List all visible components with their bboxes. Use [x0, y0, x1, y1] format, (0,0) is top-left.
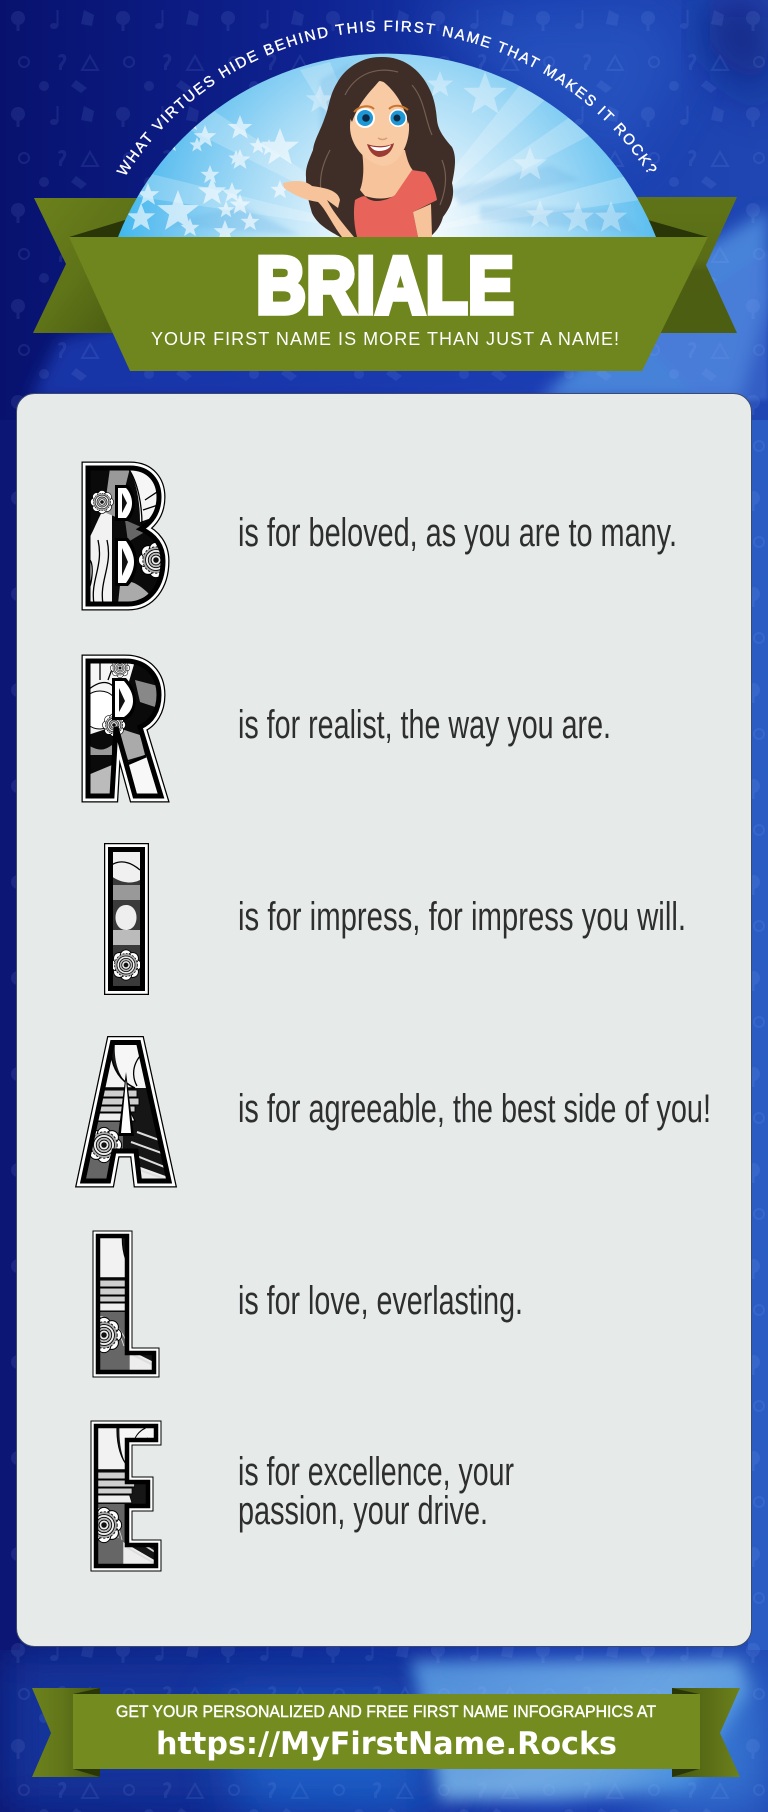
arched heading: WHAT VIRTUES HIDE BEHIND THIS FIRST NAME THAT MAKES IT ROCK? — [116, 20, 656, 175]
left ribbon tail — [33, 198, 137, 333]
letter A — [77, 1042, 187, 1192]
top ribbon tails — [33, 197, 737, 333]
letter B — [84, 464, 174, 608]
call to action: GET YOUR PERSONALIZED AND FREE FIRST NAME INFOGRAPHICS AT — [116, 1703, 656, 1721]
mouth — [367, 143, 394, 157]
bottom ribbon — [32, 1688, 740, 1777]
text: excellence: is for excellence, your — [238, 1450, 514, 1494]
text: passion: passion, your drive. — [238, 1489, 488, 1533]
shirt — [354, 170, 437, 237]
right ribbon tail — [637, 197, 737, 333]
ribbon front — [73, 1694, 700, 1769]
folds — [73, 1688, 100, 1777]
row A — [77, 1042, 711, 1192]
character illustration: woman with long brown hair and red shirt — [283, 57, 455, 237]
letter R — [81, 657, 168, 801]
tagline: YOUR FIRST NAME IS MORE THAN JUST A NAME! — [151, 329, 619, 349]
row I — [108, 848, 686, 990]
text: love: is for love, everlasting. — [238, 1279, 523, 1323]
top ribbon front — [69, 237, 708, 371]
row B — [84, 464, 677, 608]
row L — [86, 1232, 523, 1382]
left tail — [32, 1688, 100, 1777]
letter I — [108, 848, 146, 990]
letter L — [92, 1230, 160, 1378]
neck and chest — [360, 150, 415, 198]
right tail — [672, 1688, 740, 1777]
eyes — [354, 106, 408, 128]
website url: https://MyFirstName.Rocks — [156, 1726, 617, 1762]
main panel — [16, 394, 752, 1646]
letter E — [86, 1424, 164, 1574]
ribbon folds — [69, 220, 125, 237]
face — [350, 81, 409, 166]
row R — [81, 657, 611, 801]
sunburst circle with stars — [118, 54, 656, 242]
ribbon front — [69, 237, 708, 371]
text: realist: is for realist, the way you are. — [238, 703, 611, 747]
arm and hand — [283, 181, 354, 237]
name title: BRIALE — [256, 241, 514, 331]
row E — [86, 1424, 514, 1574]
